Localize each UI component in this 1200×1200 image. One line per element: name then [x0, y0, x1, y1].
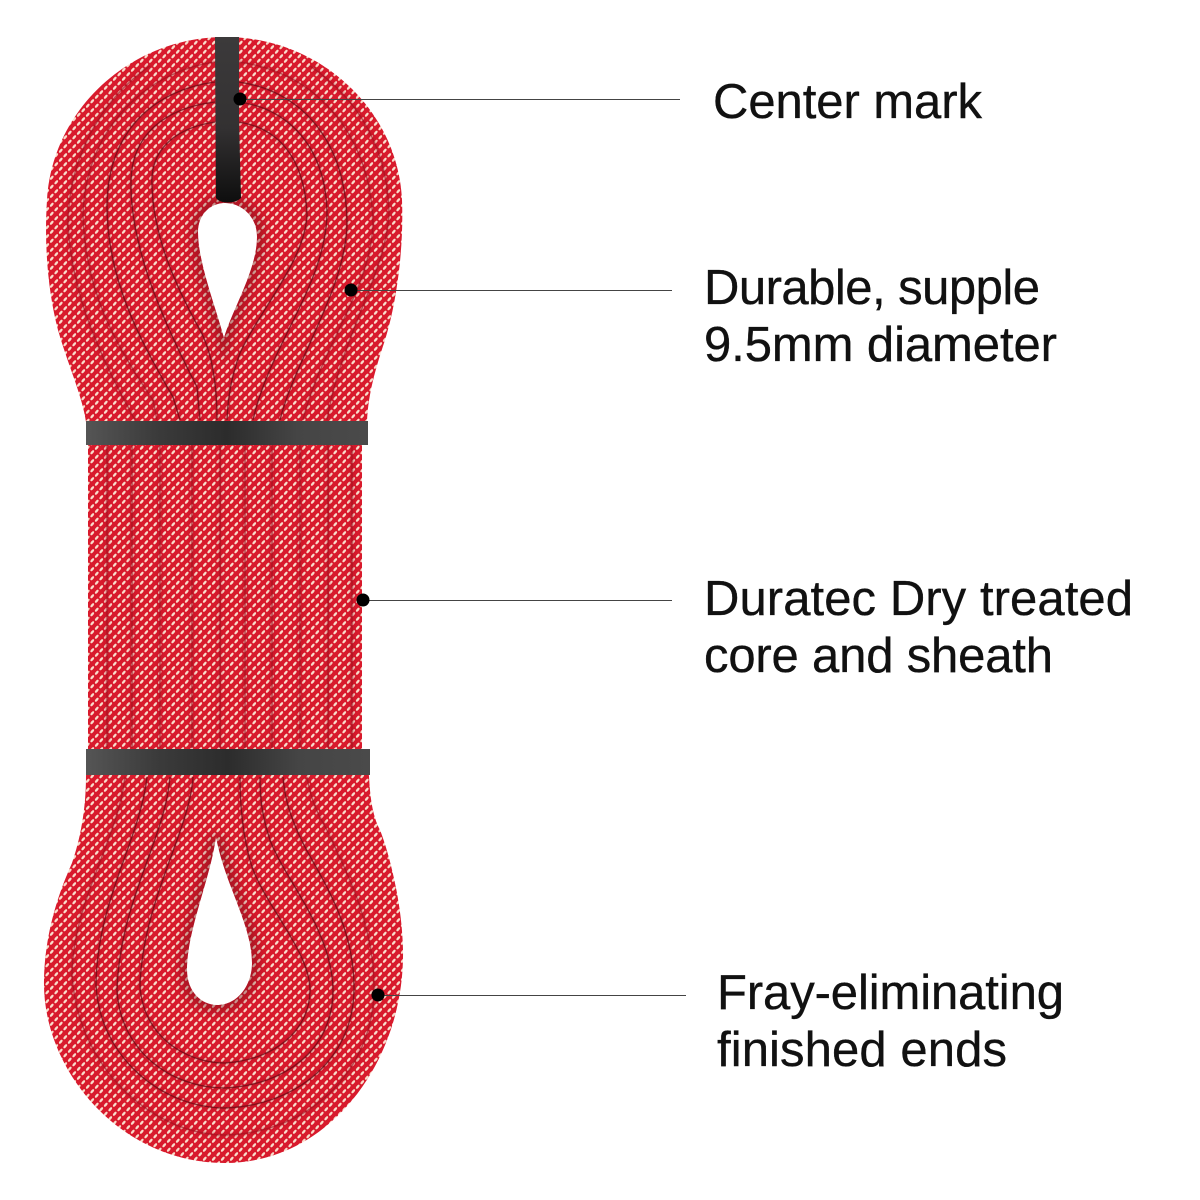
leader line: [378, 994, 686, 996]
label: Fray-eliminating: [717, 966, 1064, 1020]
rope body: [44, 37, 403, 1163]
strand shadows: [68, 62, 389, 1135]
label: 9.5mm diameter: [704, 318, 1057, 372]
label: Durable, supple: [704, 261, 1040, 315]
dot: [356, 594, 370, 606]
dot: [372, 988, 384, 1002]
label: core and sheath: [704, 629, 1053, 683]
dot: [234, 92, 246, 106]
rope coil: [44, 37, 403, 1163]
label: Duratec Dry treated: [704, 572, 1133, 626]
dot: [344, 284, 358, 296]
callout: treatment: [356, 572, 1133, 683]
callout: center mark: [234, 75, 982, 129]
label: finished ends: [717, 1023, 1007, 1077]
label: Center mark: [713, 75, 982, 129]
callout: diameter: [344, 261, 1057, 372]
rope shading: [187, 203, 257, 1005]
strand lines: outer loops: [68, 62, 389, 1135]
center mark tape: [215, 37, 241, 202]
upper black band: [86, 421, 368, 445]
strand lines: inner loops: [96, 82, 354, 1108]
callout: finished ends: [372, 966, 1064, 1077]
leader line: [240, 98, 680, 100]
lower black band: [86, 749, 370, 775]
strand lines: centre section: [107, 445, 352, 748]
leader line: [363, 600, 672, 602]
leader line: [351, 290, 672, 292]
